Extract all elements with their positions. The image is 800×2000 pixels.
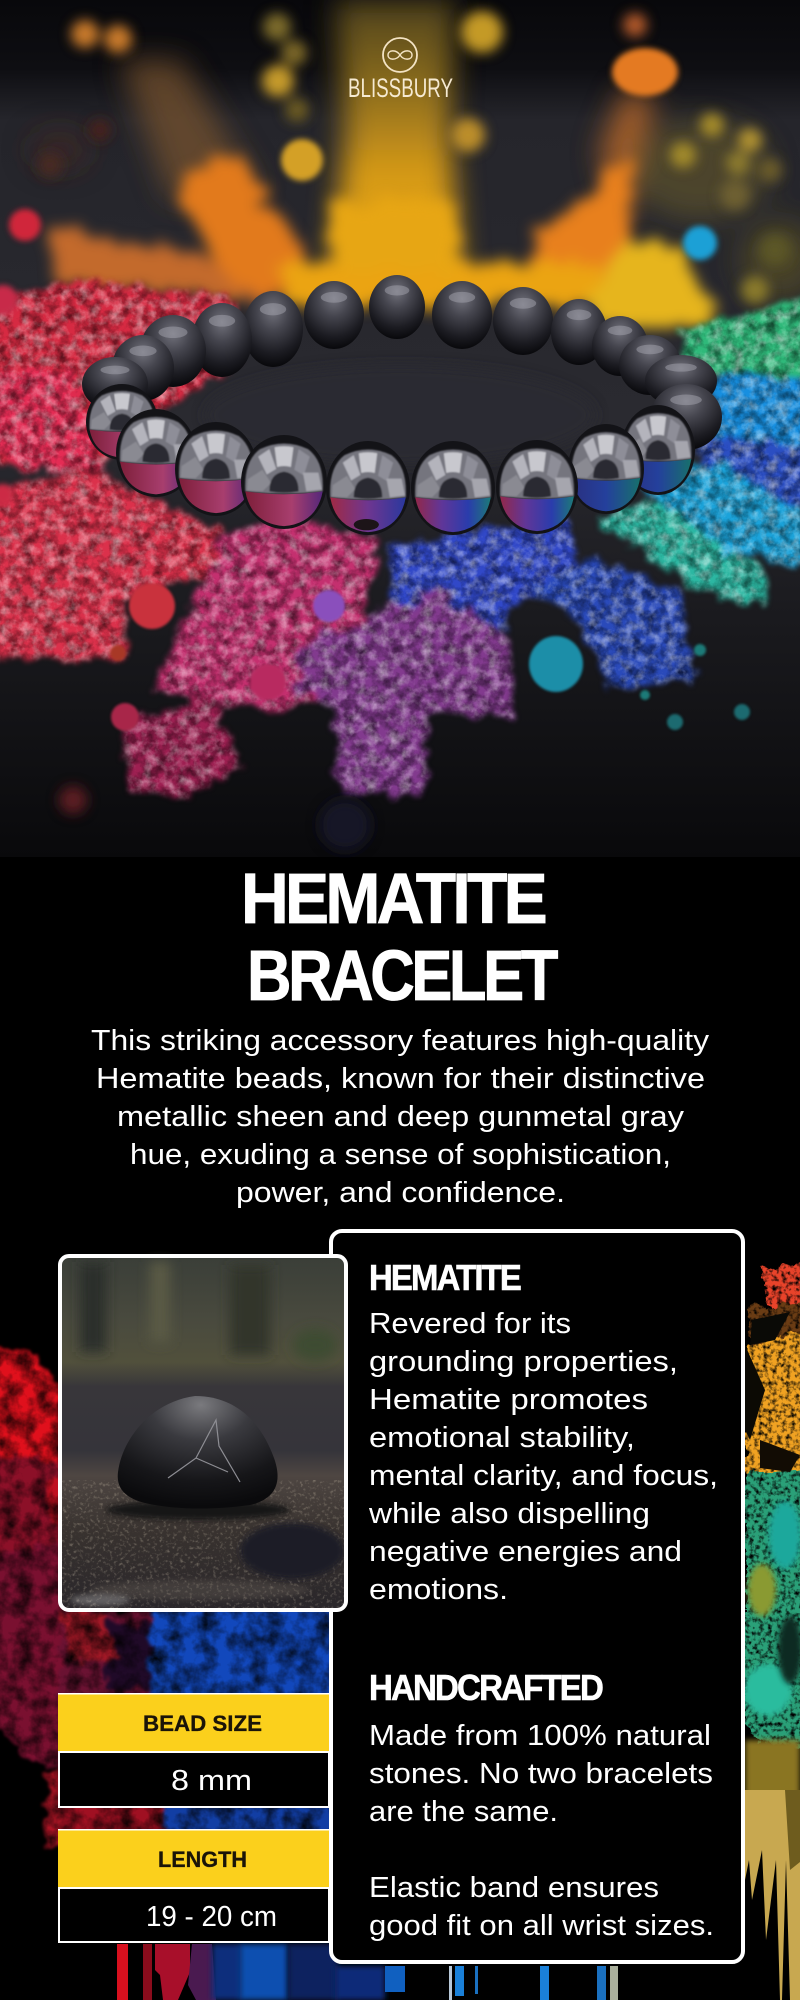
text: Hematite description: grounding properties, <box>369 1346 678 1378</box>
spec: length <box>58 1829 329 1942</box>
text: Handcrafted description <box>369 1720 714 1942</box>
stone <box>106 1396 290 1520</box>
text: Hematite description <box>368 1308 718 1606</box>
text: Hematite description: Hematite promotes <box>369 1384 648 1416</box>
inner table surface <box>205 365 595 465</box>
intro paragraph: hue, exuding a sense of sophistication, <box>130 1139 671 1171</box>
spec: length: 19 - 20 cm <box>146 1901 277 1933</box>
mid-distance powder <box>50 150 720 325</box>
left paint splash <box>0 1345 618 2000</box>
text: Handcrafted description: Made from 100% natural <box>369 1720 711 1752</box>
stone photo card <box>60 1256 346 1610</box>
text: Hematite description: emotional stability, <box>369 1422 635 1454</box>
title <box>241 860 558 1016</box>
intro paragraph: This striking accessory features high-quality <box>91 1025 710 1057</box>
intro paragraph: Hematite beads, known for their distinctive <box>96 1063 705 1095</box>
text: Hematite description: while also dispelling <box>368 1498 650 1530</box>
text: Hematite description: mental clarity, and focus, <box>369 1460 718 1492</box>
intro paragraph: metallic sheen and deep gunmetal gray <box>117 1101 685 1133</box>
spec: length: LENGTH <box>158 1847 247 1872</box>
title: HEMATITE <box>241 860 546 939</box>
text: Handcrafted description: good fit on all wrist sizes. <box>369 1910 714 1942</box>
textured powder piles <box>0 280 800 795</box>
text: Hematite description: Revered for its <box>369 1308 571 1340</box>
right paint splash <box>744 1262 800 2000</box>
bokeh balls <box>38 11 791 851</box>
logo: Blissbury <box>348 38 453 103</box>
intro paragraph <box>91 1025 710 1209</box>
intro paragraph: power, and confidence. <box>236 1177 565 1209</box>
text: Handcrafted description: Elastic band ensures <box>369 1872 659 1904</box>
hero image: bracelet on rainbow powder <box>0 0 800 857</box>
heading: Handcrafted: HANDCRAFTED <box>369 1667 603 1708</box>
text: Hematite description: emotions. <box>369 1574 508 1606</box>
info panel <box>331 1231 743 1962</box>
rising dust plumes <box>30 0 800 300</box>
logo: Blissbury: BLISSBURY <box>348 73 453 103</box>
bracelet <box>82 275 722 535</box>
spec: bead size: 8 mm <box>171 1765 252 1797</box>
spec: bead size <box>58 1693 329 1807</box>
text: Handcrafted description: are the same. <box>369 1796 558 1828</box>
bottom drips <box>117 1944 618 2000</box>
text: Hematite description: negative energies and <box>369 1536 682 1568</box>
title: BRACELET <box>247 937 558 1016</box>
spec: bead size: BEAD SIZE <box>143 1711 262 1736</box>
powder balls <box>110 583 750 731</box>
heading: Hematite: HEMATITE <box>369 1257 521 1298</box>
text: Handcrafted description: stones. No two bracelets <box>369 1758 713 1790</box>
